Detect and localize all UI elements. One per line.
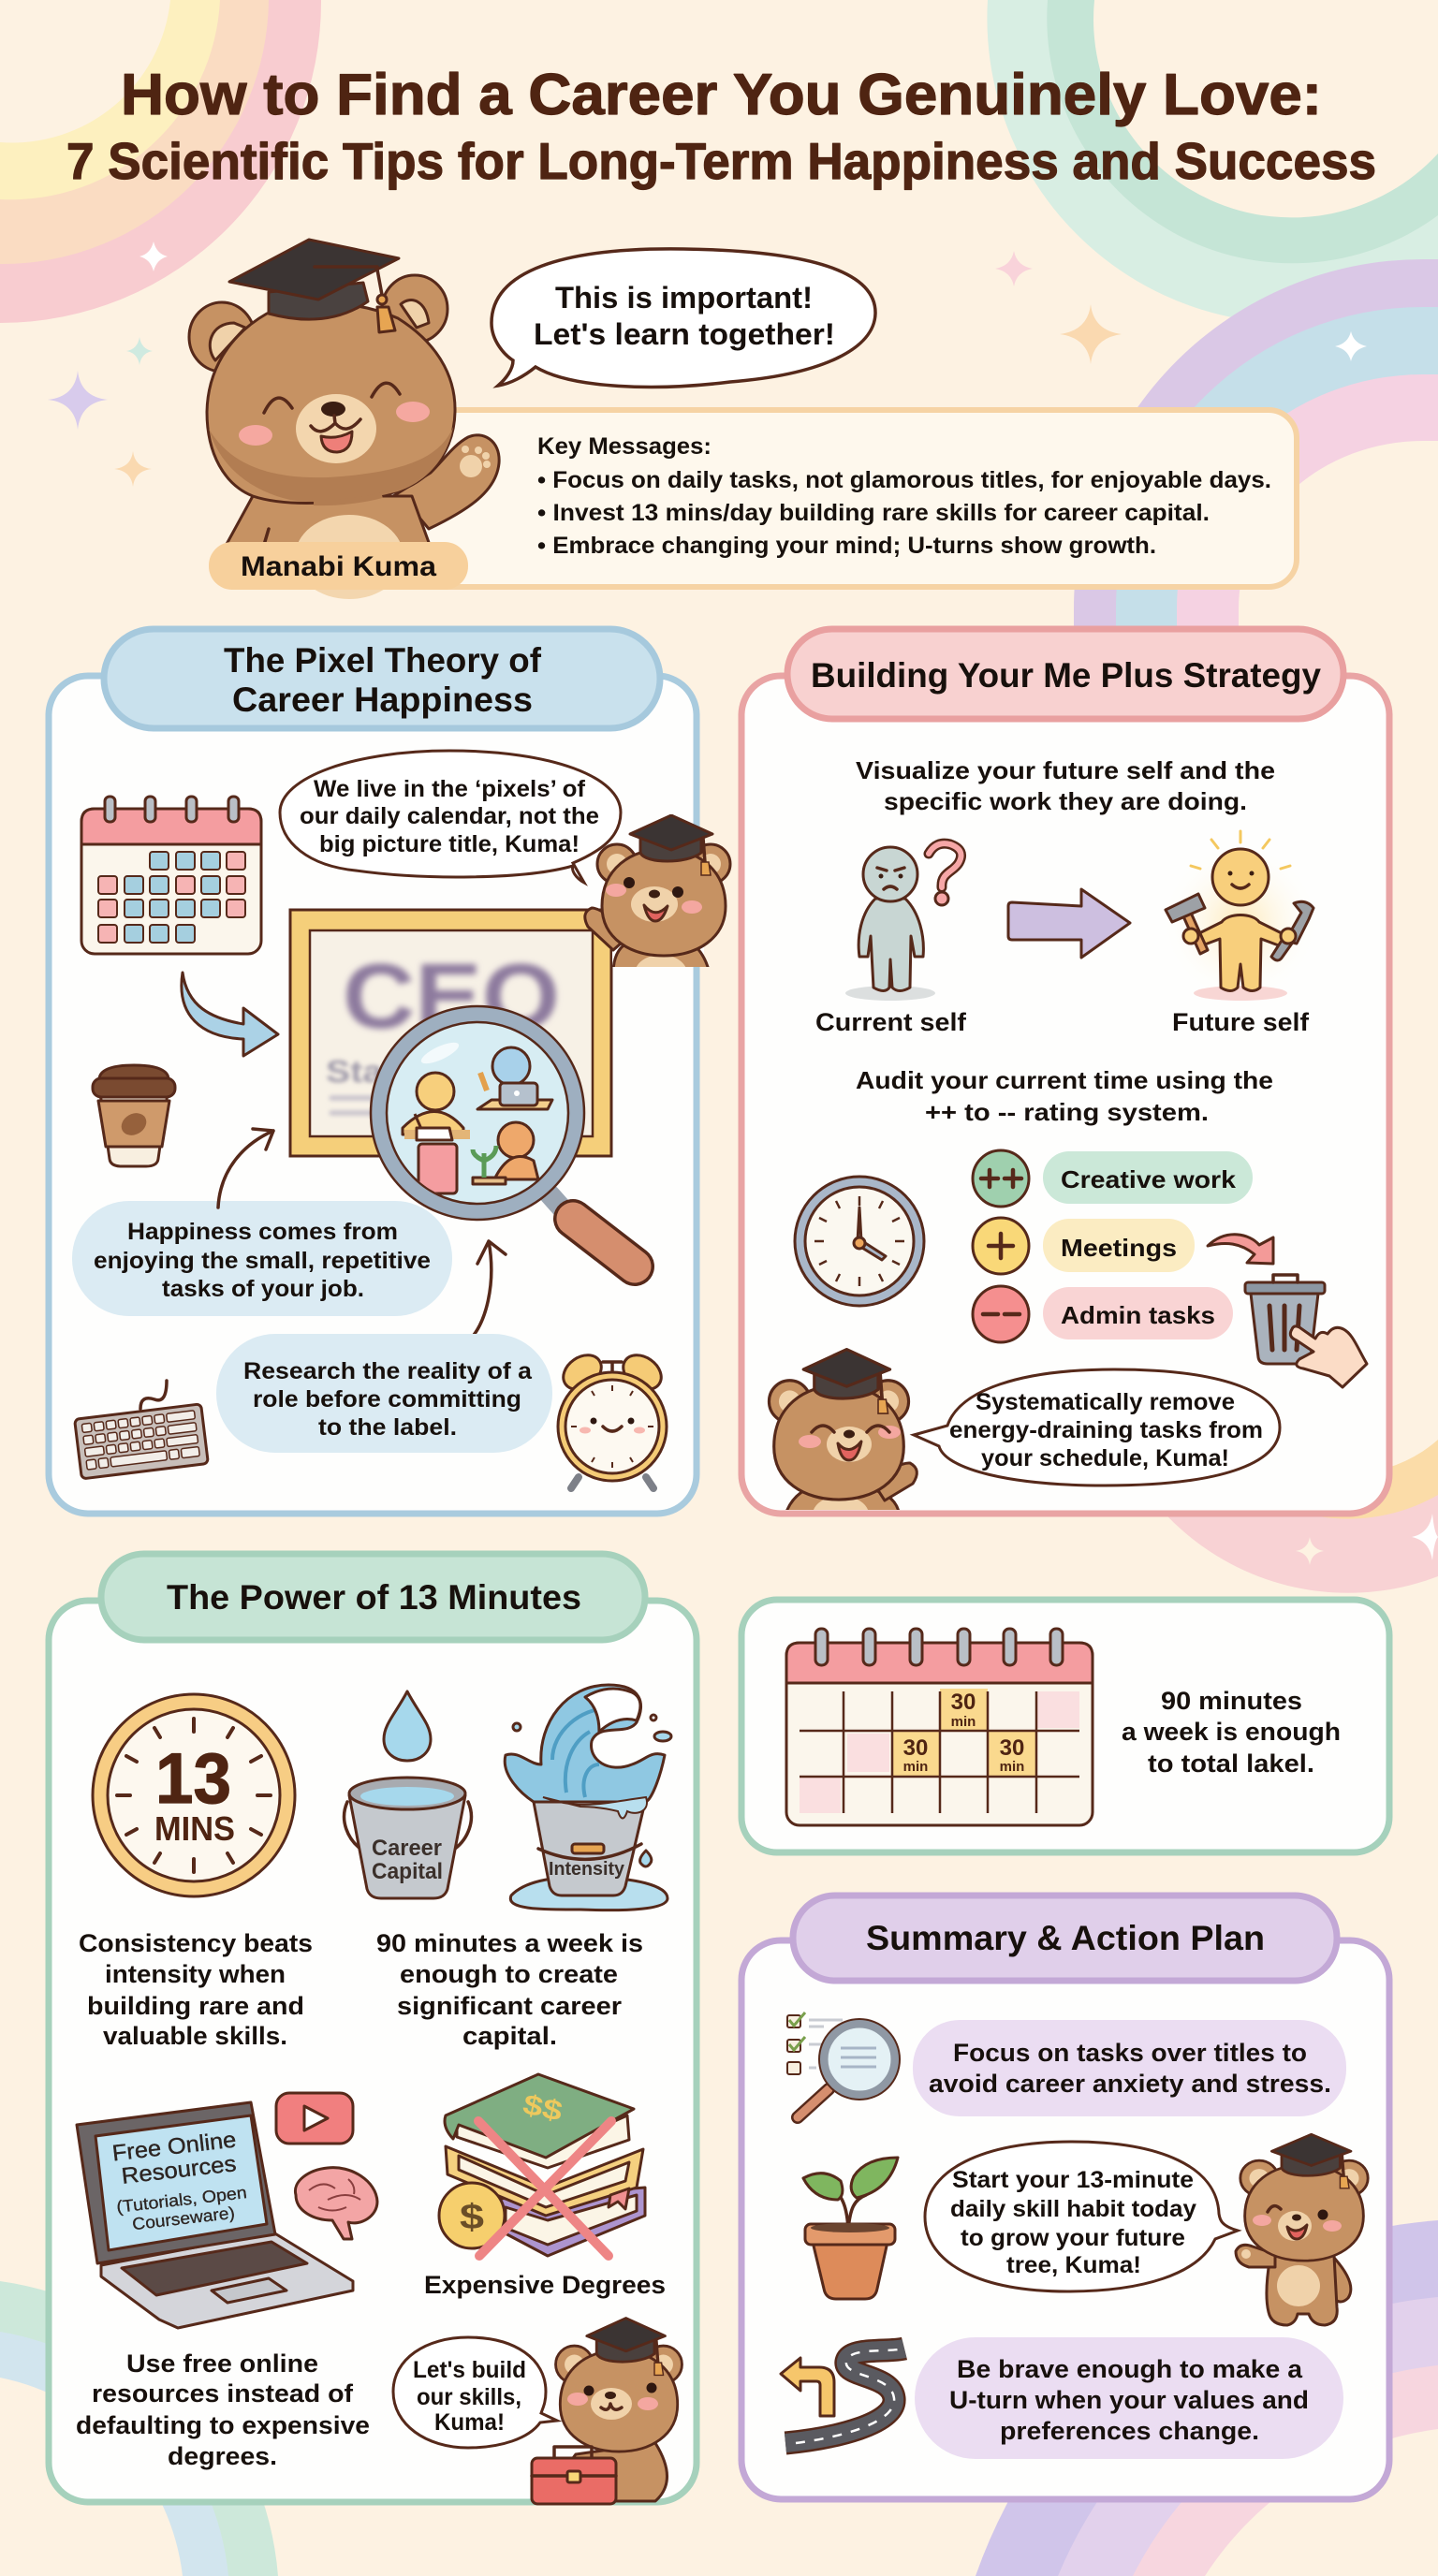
icon: 13 minute clock [93,1694,295,1896]
icon: laptop with free resources: (Tutorials, Open [115,2183,248,2217]
rating row: creative work: Creative work [1061,1165,1237,1193]
speech bubble: remove tasks: energy-draining tasks from [949,1417,1263,1443]
panel heading: pixel theory: Career Happiness [232,681,533,719]
text: consistency beats intensity: intensity when [105,1960,286,1988]
sparkles [48,242,1438,1565]
icon: keyboard [75,1381,208,1479]
mascot: bear winking [1236,2134,1368,2325]
panel heading: summary [793,1895,1337,1981]
arrow: happiness to frame [218,1129,273,1208]
text: use free online resources: defaulting to expensive [76,2411,370,2439]
icon: magnifier on daily tasks [371,1006,635,1266]
name tag: Manabi Kuma [241,551,436,582]
speech bubble: build skills: Let's build [413,2357,526,2383]
speech bubble: build skills: Kuma! [434,2409,505,2436]
labels: current and future: Current self [815,1008,967,1036]
speech bubble: This is important: This is important! [555,281,813,315]
icon: wall clock [795,1177,924,1306]
icon: career capital bucket: Career [372,1836,442,1861]
panel heading: power of 13 minutes [101,1554,645,1640]
text: 90 minutes a week [376,1929,643,2050]
callout: focus on tasks: avoid career anxiety and stress. [929,2070,1331,2098]
icon: water drop [384,1691,431,1761]
rating row: admin tasks [973,1286,1233,1342]
framed CEO title [290,910,611,1156]
icon: brain [295,2168,377,2239]
labels: current and future [815,1008,1310,1036]
icon: laptop with free resources [77,2102,353,2328]
text: use free online resources: resources instead of [92,2379,354,2408]
icon: video play button [276,2093,353,2144]
panel heading: power of 13 minutes: The Power of 13 Minutes [167,1578,581,1617]
key messages box: • Embrace changing your mind; U-turns show growth. [537,533,1156,559]
text: audit: ++ to -- rating system. [925,1098,1209,1126]
speech bubble: This is important [492,249,875,387]
text: 90 minutes a week: capital. [462,2022,557,2050]
icon: crossed out expensive degrees [424,2074,666,2299]
icon: calendar of daily pixels [81,797,261,954]
callout: focus on tasks [913,2020,1346,2116]
key messages box: • Focus on daily tasks, not glamorous titles, for enjoyable days. [537,467,1271,493]
icon: 13 minute clock: MINS [154,1809,235,1848]
panel: 90 minutes calendar [741,1600,1389,1852]
icon: toolbox [532,2447,616,2504]
rating row: creative work [973,1150,1253,1207]
icon: winding road with U-turn arrow [781,2349,904,2443]
key messages box [281,410,1297,587]
icon: weekly calendar with 30 minute blocks: 30 [903,1735,928,1761]
key messages box: • Invest 13 mins/day building rare skills for career capital. [537,500,1210,526]
speech bubble: remove tasks: your schedule, Kuma! [981,1445,1229,1471]
key messages box: Key Messages: [537,433,712,460]
text: audit: Audit your current time using the [856,1066,1273,1094]
speech bubble: start habit: daily skill habit today [950,2196,1196,2222]
callout: U-turn [915,2337,1343,2459]
panel: power of 13 minutes [49,1554,697,2504]
callout: research: Research the reality of a [243,1358,533,1384]
panel: pixel theory [49,629,730,1514]
rating row: meetings [973,1218,1195,1274]
title: How to Find a Career You Genuinely Love: [121,63,1322,127]
panel heading: pixel theory: The Pixel Theory of [224,641,542,680]
callout: happiness: Happiness comes from [127,1219,398,1245]
mascot: bear with toolbox [532,2319,682,2504]
text: consistency beats intensity: valuable skills. [103,2022,287,2050]
panel heading: pixel theory [104,629,660,728]
panel: summary and action plan [741,1895,1389,2499]
text: 90 minutes: 90 minutes [1161,1687,1302,1715]
panel heading: summary: Summary & Action Plan [866,1919,1265,1957]
framed CEO title: CEO [343,944,560,1047]
speech bubble: This is important: Let's learn together! [534,317,835,351]
icon: checklist magnifier [787,2012,900,2117]
text: consistency beats intensity: building rare and [87,1992,304,2020]
mascot: Manabi Kuma waving [189,240,499,599]
callout: happiness: tasks of your job. [162,1276,364,1302]
arrow: current to future [1008,889,1130,958]
speech bubble: pixels: our daily calendar, not the [300,803,599,829]
text: visualize: Visualize your future self and the [856,756,1275,784]
text: use free online resources [76,2349,370,2470]
callout: research: to the label. [318,1414,457,1441]
speech bubble: start habit: tree, Kuma! [1006,2252,1141,2278]
text: 90 minutes a week: enough to create [400,1960,618,1988]
icon: laptop with free resources: Free Online [110,2128,238,2166]
callout: U-turn: U-turn when your values and [949,2386,1309,2414]
callout: research: role before committing [253,1386,521,1412]
icon: career capital bucket: Capital [372,1859,443,1884]
speech bubble: pixels [280,751,621,883]
icon: intensity bucket with wave: Intensity [549,1859,625,1880]
icon: weekly calendar with 30 minute blocks: min [903,1759,928,1775]
figure: current self [845,843,961,1001]
speech bubble: build skills: our skills, [417,2384,521,2410]
text: visualize: specific work they are doing. [884,787,1247,815]
icon: career capital bucket [345,1778,471,1898]
icon: crossed out expensive degrees: $ [460,2198,484,2237]
panel: me plus strategy [741,629,1389,1533]
icon: weekly calendar with 30 minute blocks: min [951,1714,976,1730]
mascot: bear waving from frame [583,814,732,967]
text: 90 minutes: a week is enough [1122,1718,1341,1746]
icon: coffee cup [93,1065,175,1166]
icon: crossed out expensive degrees: $$ [521,2089,565,2128]
speech bubble: start habit [925,2142,1238,2291]
callout: U-turn: Be brave enough to make a [957,2355,1303,2383]
title: 7 Scientific Tips for Long-Term Happiness and Success [66,132,1376,190]
text: use free online resources: Use free online [126,2349,318,2378]
speech bubble: start habit: Start your 13-minute [952,2167,1194,2193]
speech bubble: pixels: We live in the ‘pixels’ of [314,776,586,802]
speech bubble: start habit: to grow your future [961,2225,1185,2251]
panel heading: me plus strategy [787,629,1343,719]
icon: crossed out expensive degrees: Expensive Degrees [424,2271,666,2299]
speech bubble: remove tasks: Systematically remove [976,1389,1235,1415]
title [66,63,1376,190]
text: consistency beats intensity [79,1929,313,2050]
icon: potted sprout [803,2158,898,2299]
text: visualize [856,756,1275,815]
icon: 13 minute clock: 13 [155,1739,231,1819]
figure: future self [1161,831,1320,1002]
icon: trash can and hand [1245,1275,1367,1387]
icon: weekly calendar with 30 minute blocks: min [1000,1759,1024,1775]
icon: laptop with free resources: Resources [120,2151,238,2189]
text: consistency beats intensity: Consistency beats [79,1929,313,1957]
icon: laptop with free resources: Courseware) [131,2203,236,2233]
arrow: research to magnifier [467,1241,506,1342]
arrow: calendar to frame [182,973,278,1056]
text: 90 minutes: to total lakel. [1148,1749,1314,1778]
callout: U-turn: preferences change. [1000,2417,1259,2445]
callout: happiness: enjoying the small, repetitive [94,1248,431,1274]
framed CEO title: Status [326,1054,438,1089]
icon: weekly calendar with 30 minute blocks: 30 [1000,1735,1024,1761]
rating row: meetings: Meetings [1061,1234,1177,1262]
mascot: bear laughing [769,1350,917,1533]
labels: current and future: Future self [1172,1008,1310,1036]
speech bubble: build skills [393,2337,557,2448]
rating row: admin tasks: Admin tasks [1061,1301,1215,1329]
icon: intensity bucket with wave [505,1685,671,1910]
callout: happiness [72,1201,452,1316]
text: use free online resources: degrees. [168,2442,277,2470]
text: audit [856,1066,1273,1126]
callout: research [216,1334,552,1453]
text: 90 minutes a week: significant career [397,1992,623,2020]
text: 90 minutes a week: 90 minutes a week is [376,1929,643,1957]
text: 90 minutes [1122,1687,1341,1778]
speech bubble: pixels: big picture title, Kuma! [319,831,580,857]
panel heading: me plus strategy: Building Your Me Plus Strategy [811,656,1321,695]
icon: smiling alarm clock [557,1348,668,1488]
callout: focus on tasks: Focus on tasks over titles to [953,2039,1307,2067]
speech bubble: remove tasks [914,1369,1280,1486]
name tag [209,542,468,590]
icon: weekly calendar with 30 minute blocks: 30 [951,1690,976,1715]
arrow: into trash [1208,1235,1273,1264]
icon: weekly calendar with 30 minute blocks [786,1629,1093,1825]
